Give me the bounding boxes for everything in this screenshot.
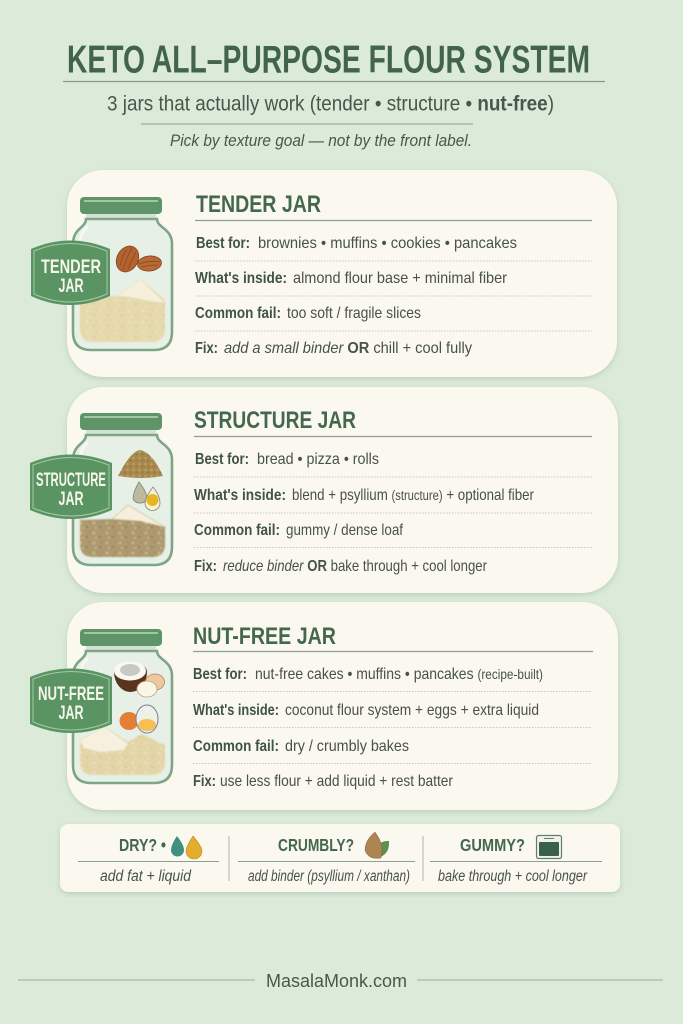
icon: tender jar bbox=[73, 197, 172, 350]
row: best for: Best for: bbox=[196, 235, 250, 252]
heading: TENDER JAR bbox=[196, 191, 321, 218]
row: common fail: gummy / dense loaf bbox=[286, 522, 403, 539]
panel: structure jar bbox=[30, 387, 618, 593]
dry column: add fat + liquid bbox=[100, 868, 192, 885]
heading: STRUCTURE JAR bbox=[194, 407, 356, 434]
row: fix: Fix: bbox=[193, 773, 216, 790]
icon: drops bbox=[171, 836, 202, 859]
row: inside: What's inside: bbox=[193, 702, 279, 719]
row: common fail bbox=[193, 738, 409, 755]
icon: structure jar bbox=[73, 413, 172, 565]
badge: tender jar bbox=[31, 240, 110, 305]
header bbox=[63, 38, 605, 150]
badge: structure jar: JAR bbox=[58, 489, 84, 510]
heading: NUT-FREE JAR bbox=[193, 623, 336, 650]
panel: tender jar bbox=[31, 170, 617, 377]
row: inside: coconut flour system + eggs + extra liquid bbox=[285, 702, 539, 719]
row: common fail: Common fail: bbox=[195, 305, 281, 322]
icon: seed pile bbox=[118, 450, 163, 478]
row: inside: What's inside: bbox=[194, 487, 286, 504]
row: common fail bbox=[195, 305, 421, 322]
gummy column bbox=[430, 835, 602, 885]
row: best for: Best for: bbox=[195, 451, 249, 468]
row: best for bbox=[195, 451, 379, 468]
row: fix: use less flour + add liquid + rest batter bbox=[220, 773, 454, 790]
row: inside: What's inside: bbox=[195, 270, 287, 287]
row: inside bbox=[193, 702, 539, 719]
subtitle: 3 jars that actually work (tender • structure • nut-free) bbox=[107, 92, 554, 116]
badge: nut-free jar: JAR bbox=[58, 703, 84, 724]
row: common fail: dry / crumbly bakes bbox=[285, 738, 409, 755]
icon: coconut and eggs bbox=[114, 662, 164, 697]
icon: almonds bbox=[112, 242, 162, 276]
crumbly column bbox=[238, 832, 415, 885]
row: fix: Fix: bbox=[194, 558, 217, 575]
badge: structure jar bbox=[30, 454, 112, 519]
row: inside bbox=[195, 270, 508, 287]
tagline: Pick by texture goal — not by the front label. bbox=[170, 131, 472, 150]
strip background bbox=[60, 824, 620, 892]
crumbly column: add binder (psyllium / xanthan) bbox=[248, 868, 410, 885]
brand: MasalaMonk.com bbox=[266, 971, 407, 991]
row: common fail: Common fail: bbox=[194, 522, 280, 539]
badge: tender jar: TENDER bbox=[41, 257, 101, 278]
badge: nut-free jar: NUT-FREE bbox=[38, 684, 104, 705]
icon: nut-free jar bbox=[73, 629, 172, 783]
icon: egg and yolk bbox=[120, 705, 158, 733]
row: fix: add a small binder OR chill + cool fully bbox=[224, 340, 472, 357]
dry column bbox=[78, 835, 219, 885]
row: inside: blend + psyllium (structure) + optional fiber bbox=[292, 487, 535, 504]
badge: structure jar: STRUCTURE bbox=[36, 470, 106, 491]
row: common fail bbox=[194, 522, 403, 539]
card background bbox=[67, 387, 618, 593]
card background bbox=[67, 602, 618, 810]
crumbly column: CRUMBLY? bbox=[278, 835, 354, 855]
icon: drops bbox=[133, 482, 160, 511]
row: fix: reduce binder OR bake through + cool longer bbox=[223, 558, 488, 575]
row: common fail: too soft / fragile slices bbox=[287, 305, 421, 322]
row: inside: almond flour base + minimal fiber bbox=[293, 270, 508, 287]
row: common fail: Common fail: bbox=[193, 738, 279, 755]
panel: troubleshooting strip bbox=[60, 824, 620, 892]
dry column: DRY? • bbox=[119, 835, 166, 855]
row: inside bbox=[194, 487, 535, 504]
badge: tender jar: JAR bbox=[58, 276, 84, 297]
icon: leaf and almond bbox=[365, 832, 389, 858]
panel: nut-free jar bbox=[30, 602, 618, 810]
badge: nut-free jar bbox=[30, 668, 112, 733]
row: best for: nut-free cakes • muffins • pancakes (recipe-built) bbox=[255, 666, 543, 683]
icon: oven bbox=[536, 836, 562, 858]
row: best for: bread • pizza • rolls bbox=[257, 451, 379, 468]
row: best for: Best for: bbox=[193, 666, 247, 683]
row: best for: brownies • muffins • cookies • pancakes bbox=[258, 235, 517, 252]
gummy column: bake through + cool longer bbox=[438, 868, 588, 885]
card background bbox=[67, 170, 617, 377]
row: fix: Fix: bbox=[195, 340, 218, 357]
gummy column: GUMMY? bbox=[460, 835, 525, 855]
